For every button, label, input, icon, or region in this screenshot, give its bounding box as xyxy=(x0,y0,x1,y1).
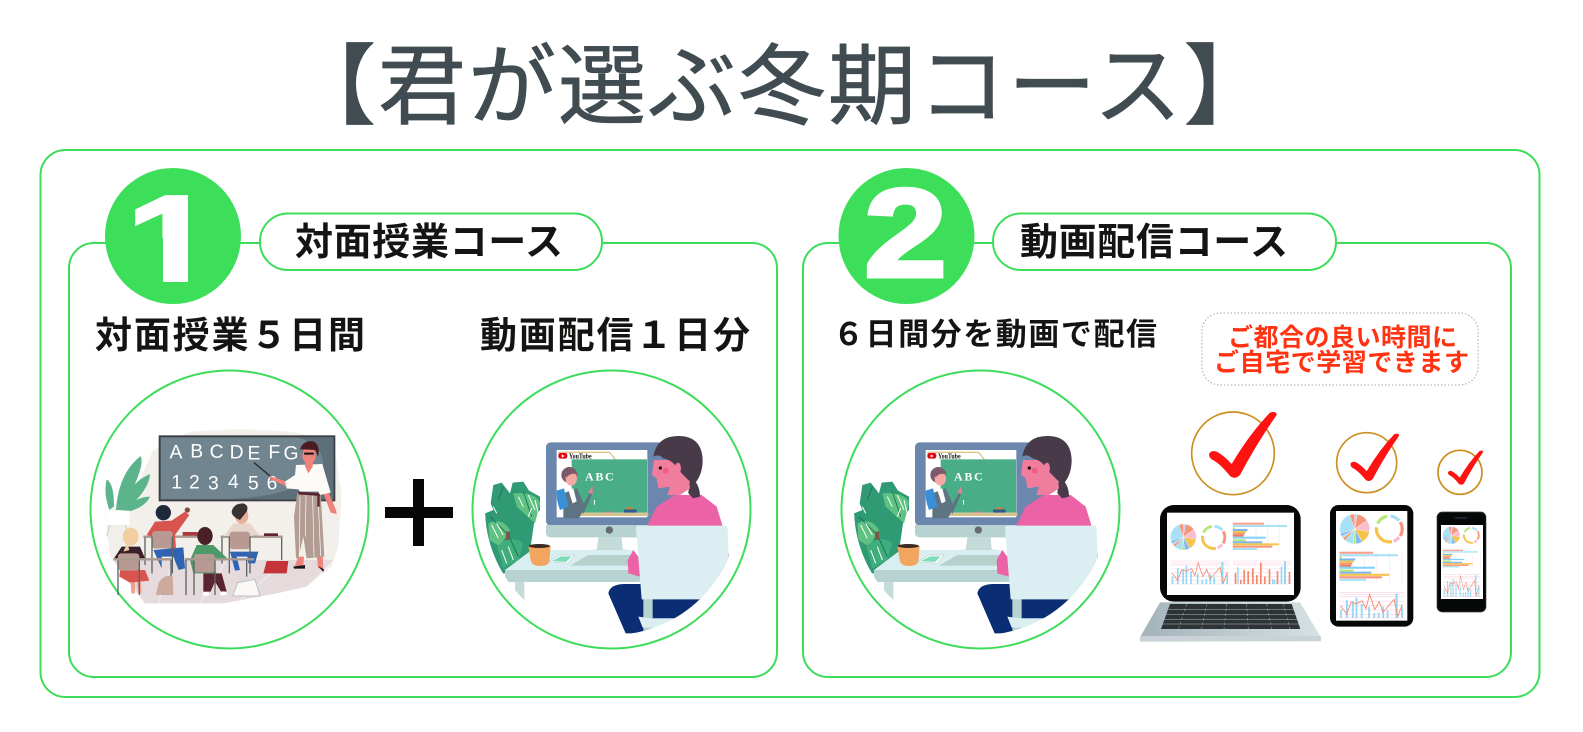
blackboard: G xyxy=(283,443,299,464)
blackboard xyxy=(159,435,335,501)
blackboard: 5 xyxy=(248,473,259,494)
panel 2 border xyxy=(803,243,1511,677)
subheading: 5 days face-to-face: 対面授業５日間 xyxy=(95,315,365,356)
callout: study at home: ご自宅で学習できます xyxy=(1214,348,1469,377)
blackboard: B xyxy=(190,441,203,462)
circle: online learning illustration copy xyxy=(842,370,1120,648)
desks xyxy=(143,532,283,565)
plus sign xyxy=(385,479,453,546)
blackboard: E xyxy=(248,443,261,464)
plant with pot xyxy=(105,456,150,537)
title: 【君が選ぶ冬期コース】 xyxy=(288,37,1274,136)
student green shirt xyxy=(185,527,254,596)
teacher xyxy=(269,441,337,572)
blackboard: F xyxy=(268,443,280,464)
number badge 1 xyxy=(105,168,241,307)
subheading: 6 days video: ６日間分を動画で配信 xyxy=(833,317,1157,352)
ABC on screen board: ABC xyxy=(954,470,983,484)
student blonde xyxy=(113,528,172,595)
number badge 2: 2 xyxy=(864,163,947,304)
blackboard: C xyxy=(210,442,224,463)
circle: classroom illustration xyxy=(90,370,368,648)
callout: study at home: ご都合の良い時間に xyxy=(1228,323,1457,352)
YouTube label: YouTube xyxy=(938,452,961,461)
panel 1 border xyxy=(69,243,777,677)
course 2 label pill: 動画配信コース xyxy=(1020,222,1288,264)
circle: online learning illustration xyxy=(472,370,750,648)
blackboard: D xyxy=(230,443,244,464)
blackboard: 3 xyxy=(208,473,219,494)
blackboard: 6 xyxy=(267,473,277,494)
callout: study at home xyxy=(1202,313,1478,385)
course 2 label pill xyxy=(993,214,1336,270)
keyboard xyxy=(1161,604,1300,629)
outer frame xyxy=(40,150,1540,697)
check icon: medium xyxy=(1337,433,1399,493)
student watching video xyxy=(854,436,1099,633)
smartphone xyxy=(1437,512,1486,612)
bags on floor xyxy=(156,561,288,596)
course 1 label pill: 対面授業コース xyxy=(295,222,563,264)
check icon: large xyxy=(1192,412,1277,495)
student raising hand xyxy=(147,505,190,573)
ABC on screen board: ABC xyxy=(585,470,614,484)
tablet xyxy=(1330,505,1413,627)
laptop xyxy=(1140,505,1321,641)
number badge 1: 1 xyxy=(126,170,218,307)
check icon: small xyxy=(1438,450,1483,494)
blackboard: 4 xyxy=(228,472,239,493)
blackboard: A xyxy=(170,443,183,464)
devices group xyxy=(1140,412,1486,641)
YouTube label: YouTube xyxy=(569,452,592,461)
number badge 2 xyxy=(838,163,974,304)
classroom scene xyxy=(105,429,342,603)
blackboard: 2 xyxy=(189,473,200,494)
panel: course 2 video xyxy=(803,163,1511,677)
student watching video xyxy=(485,436,730,633)
panel: course 1 face-to-face xyxy=(69,168,777,677)
blackboard: 1 xyxy=(171,473,182,494)
student beige shirt xyxy=(224,503,259,573)
course 1 label pill xyxy=(260,214,602,270)
subheading: 1 day video: 動画配信１日分 xyxy=(480,315,750,356)
